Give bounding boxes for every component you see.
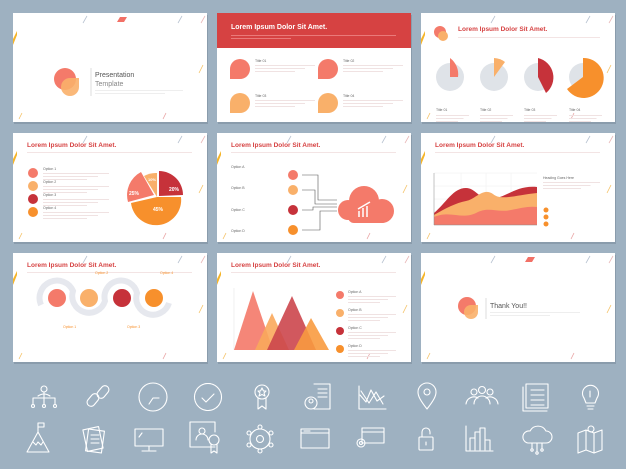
slide 8: triangle chart (217, 253, 412, 364)
row 1 (32, 386, 56, 408)
title: Lorem Ipsum Dolor Sit Amet. (458, 26, 548, 33)
slide 5: cloud flow: Option B (231, 186, 245, 190)
slide 6: area chart: Heading Goes Here (543, 176, 574, 180)
slide 7: timeline: Option 1 (63, 325, 76, 329)
title text: Template (95, 81, 124, 88)
titles: Title 04 (569, 108, 580, 112)
slide 7: timeline: Option 4 (160, 271, 173, 275)
options list (28, 167, 109, 219)
triangles (234, 288, 329, 350)
item 01 (230, 59, 315, 79)
slide 1: presentation template (13, 13, 208, 124)
options list: Option 4 (43, 206, 56, 210)
slide 7: timeline: Option 2 (95, 271, 108, 275)
area chart (434, 173, 537, 225)
item 03 (230, 93, 315, 113)
slide 9: thank you: Thank You!! (490, 303, 527, 310)
options: Option C (348, 326, 362, 330)
pie chart: 25% (129, 191, 140, 197)
item 02 (318, 59, 403, 79)
titles: Title 01 (436, 108, 447, 112)
pie chart (127, 171, 183, 225)
item 04 (318, 93, 403, 113)
slide 7: timeline: Option 3 (127, 325, 140, 329)
item 04: Title 04 (343, 94, 354, 98)
slide 4: pie options: Lorem Ipsum Dolor Sit Amet. (27, 142, 117, 149)
slide 3: pie charts (421, 13, 616, 124)
slide 5: cloud flow: Option A (231, 165, 245, 169)
title text: Presentation (95, 72, 134, 79)
options: Option D (348, 344, 362, 348)
connector lines (302, 175, 337, 230)
slide 5: cloud flow: Option D (231, 229, 245, 233)
options list: Option 3 (43, 193, 56, 197)
slide 5: cloud flow: Option C (231, 208, 245, 212)
logo (54, 68, 79, 96)
row 2 (27, 423, 49, 452)
slide 6: area chart: Lorem Ipsum Dolor Sit Amet. (435, 142, 525, 149)
titles: Title 02 (480, 108, 491, 112)
icon set (27, 383, 602, 454)
slide 8: triangle chart: Lorem Ipsum Dolor Sit Amet. (231, 262, 321, 269)
item 02: Title 02 (343, 59, 354, 63)
slide 4: pie options (13, 133, 208, 244)
item 03: Title 03 (255, 94, 266, 98)
item 01: Title 01 (255, 59, 266, 63)
slide 9: thank you (421, 253, 616, 364)
option icons (288, 170, 298, 235)
options list: Option 1 (43, 167, 56, 171)
slide 7: timeline: Lorem Ipsum Dolor Sit Amet. (27, 262, 117, 269)
titles (436, 108, 580, 112)
title text (95, 72, 134, 88)
slide 6: area chart (421, 133, 616, 244)
options list: Option 2 (43, 180, 56, 184)
slide 5: cloud flow (217, 133, 412, 244)
header band: Lorem Ipsum Dolor Sit Amet. (231, 24, 327, 31)
timeline circles (48, 289, 163, 307)
pie chart: 20% (169, 187, 180, 193)
titles: Title 03 (524, 108, 535, 112)
options: Option B (348, 308, 362, 312)
pie chart: 45% (153, 207, 164, 213)
slide 5: cloud flow: Lorem Ipsum Dolor Sit Amet. (231, 142, 321, 149)
slide 2: four titles (217, 13, 412, 124)
slide 7: timeline (13, 253, 208, 364)
cloud (338, 186, 394, 223)
header band (217, 13, 411, 48)
options (336, 290, 396, 357)
pie chart: 10% (148, 177, 156, 182)
options: Option A (348, 290, 362, 294)
pies (436, 58, 604, 98)
